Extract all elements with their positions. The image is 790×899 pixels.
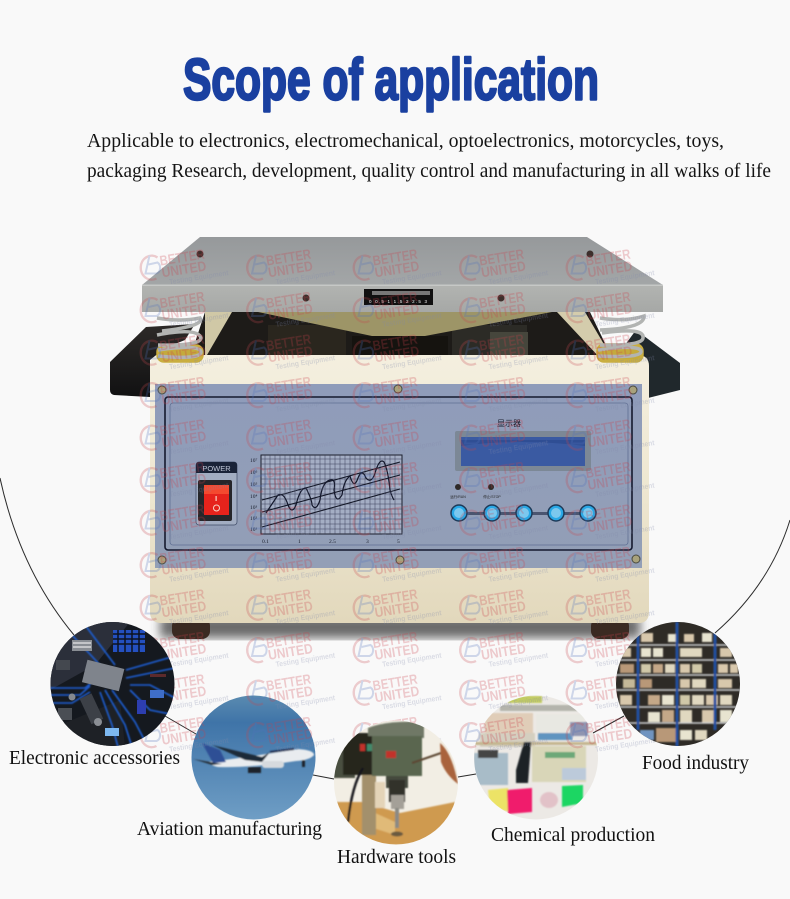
interior cavity <box>190 312 612 358</box>
logo watermark tiles <box>136 246 669 756</box>
status LEDs <box>450 484 501 499</box>
amplitude scale: 0 0.5 1 1.5 2 2.5 3 <box>369 299 427 304</box>
vibration chart: 10⁴ <box>250 494 258 500</box>
label: electronic accessories: Electronic accessories <box>9 747 180 769</box>
description text: packaging Research, development, quality control and manufacturing in all walks of life <box>87 160 771 182</box>
power switch <box>196 462 237 525</box>
right spring <box>598 316 644 361</box>
vibration chart: 2.5 <box>329 539 336 545</box>
photo: chemical <box>473 695 598 820</box>
vibration chart: 10⁵ <box>250 482 258 488</box>
vibration chart: 10⁷ <box>250 458 258 464</box>
vibration chart: 3 <box>366 539 369 545</box>
centre cradle <box>268 325 346 357</box>
connector arcs and lines <box>0 478 790 779</box>
photo: electronics <box>50 622 175 747</box>
status LEDs: 停止/STOP <box>483 494 501 499</box>
cabinet body <box>150 355 649 623</box>
top plate <box>142 237 663 285</box>
plate bolts <box>196 250 594 302</box>
power switch: POWER <box>202 464 231 473</box>
vibration chart <box>250 455 402 545</box>
label: chemical production: Chemical production <box>491 824 655 846</box>
keypad buttons <box>451 505 596 521</box>
display heading: 显示器 <box>497 419 521 428</box>
photo: aviation <box>191 695 316 820</box>
label: hardware tools: Hardware tools <box>337 846 456 868</box>
left handle <box>110 324 195 397</box>
description text <box>87 130 771 182</box>
machine feet <box>172 618 629 639</box>
amplitude scale <box>364 289 433 305</box>
vibration chart: 10¹ <box>250 527 258 533</box>
control panel <box>155 384 642 568</box>
vibration chart: 5 <box>397 539 400 545</box>
vibration chart: 10³ <box>250 505 258 511</box>
photo: food warehouse <box>615 622 740 747</box>
panel screws <box>158 385 640 564</box>
vibration chart: 0.1 <box>262 539 269 545</box>
vibration test machine <box>110 237 680 639</box>
label: food industry: Food industry <box>642 752 749 774</box>
status LEDs: 运行/RUN <box>450 494 466 499</box>
floor shadow <box>160 616 640 638</box>
vibration chart: 10² <box>250 516 258 522</box>
right handle <box>625 330 680 398</box>
LCD display <box>455 431 591 471</box>
photo: hardware <box>333 720 458 845</box>
left spring <box>157 318 202 361</box>
side brackets <box>205 312 232 355</box>
label: aviation manufacturing: Aviation manufacturing <box>137 818 322 840</box>
vibration chart: 1 <box>298 539 301 545</box>
title: Scope of application <box>183 48 599 112</box>
vibration chart: 10⁶ <box>250 470 258 476</box>
description text: Applicable to electronics, electromechanical, optoelectronics, motorcycles, toys, <box>87 130 724 152</box>
